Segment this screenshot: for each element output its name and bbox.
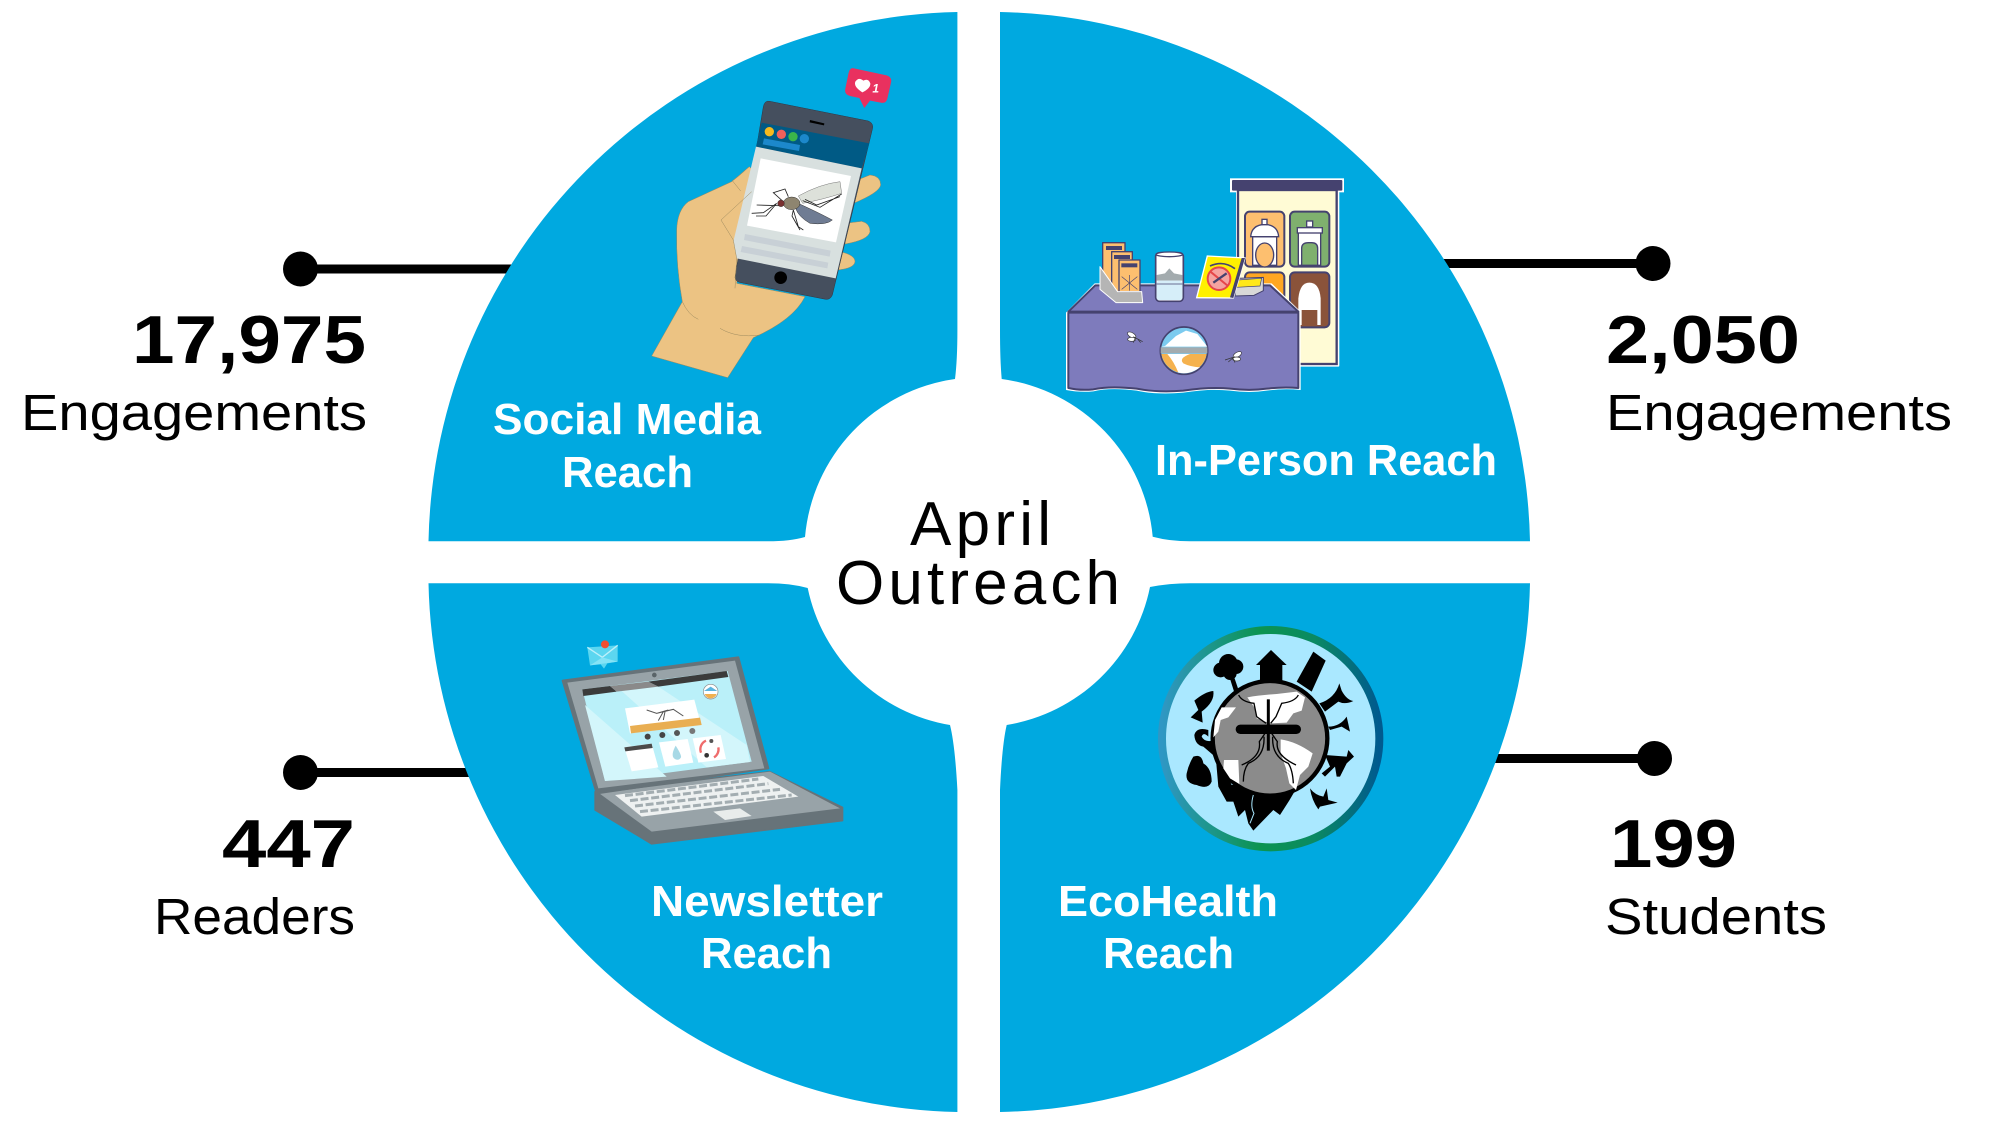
newsletter page content — [624, 684, 726, 771]
stat: ecohealth students: 199 — [1610, 806, 1737, 882]
phone body — [733, 101, 873, 299]
person two — [1328, 717, 1350, 732]
banner bottles — [1251, 219, 1322, 325]
stat: in-person engagements: 2,050 — [1606, 302, 1800, 378]
central title — [836, 490, 1120, 618]
label: newsletter reach — [651, 877, 883, 978]
roots — [1215, 748, 1298, 831]
banner stand — [1230, 178, 1344, 367]
icon: like notification badge: 1 — [872, 82, 879, 96]
panel: in-person quadrant — [1000, 12, 1530, 541]
panel: newsletter quadrant — [428, 583, 957, 1112]
icon: email notification — [587, 640, 618, 669]
panel: connector ecohealth — [1480, 741, 1672, 776]
stat: ecohealth students — [1605, 806, 1827, 945]
label: ecohealth reach: EcoHealth — [1058, 877, 1278, 926]
stat: in-person engagements: Engagements — [1606, 384, 1952, 441]
globe — [1213, 681, 1327, 796]
silhouettes around globe — [1186, 650, 1354, 831]
label: ecohealth reach: Reach — [1103, 929, 1234, 978]
table mosquitoes — [1126, 331, 1243, 363]
label: in-person reach: In-Person Reach — [1155, 436, 1497, 485]
table logo — [1160, 327, 1208, 374]
stat: social media engagements: 17,975 — [132, 302, 366, 378]
icon: hand holding phone with mosquito — [652, 68, 891, 378]
panel: connector newsletter — [283, 755, 485, 790]
laptop base — [595, 772, 843, 844]
continents — [1213, 692, 1313, 790]
stat: ecohealth students: Students — [1605, 888, 1827, 945]
label: social media reach — [493, 395, 762, 497]
icon: ecohealth globe logo — [1162, 630, 1379, 847]
logo ring — [1162, 630, 1379, 847]
stat: social media engagements: Engagements — [21, 384, 367, 441]
stat: newsletter readers: Readers — [154, 888, 355, 945]
house — [1256, 650, 1287, 682]
dog — [1322, 750, 1354, 777]
label: ecohealth reach — [1058, 877, 1278, 978]
label: social media reach: Social Media — [493, 395, 762, 444]
label: newsletter reach: Newsletter — [651, 877, 883, 926]
icon: like notification badge — [845, 68, 891, 108]
river line — [1250, 795, 1254, 823]
panel: connector in-person — [1430, 246, 1670, 281]
mosquito on globe — [1236, 695, 1301, 783]
cloud — [1186, 756, 1212, 787]
icon: laptop with newsletter — [563, 640, 843, 844]
stat: social media engagements — [21, 302, 367, 441]
stat: newsletter readers — [154, 806, 355, 945]
bird — [1310, 788, 1338, 809]
panel: social media quadrant — [428, 12, 957, 541]
laptop screen lid — [563, 657, 768, 793]
stat: in-person engagements — [1606, 302, 1952, 441]
skyscraper — [1297, 652, 1326, 692]
hand thumb crease lines — [682, 167, 760, 336]
icon: outreach table with banner and products — [1066, 178, 1344, 393]
yellow poster and leaflet stack — [1197, 256, 1263, 298]
wave — [1194, 729, 1215, 757]
stat: newsletter readers: 447 — [222, 806, 355, 882]
fish — [1191, 691, 1214, 723]
central title: April — [910, 490, 1051, 559]
label: social media reach: Reach — [562, 448, 693, 497]
mosquito on screen — [752, 182, 842, 230]
central title: Outreach — [836, 549, 1120, 618]
panel: connector social media — [283, 252, 525, 286]
person one — [1319, 683, 1353, 712]
hand fingers and palm — [652, 167, 881, 378]
water jar — [1156, 252, 1183, 301]
tree — [1213, 654, 1243, 691]
label: newsletter reach: Reach — [701, 929, 832, 978]
table — [1066, 283, 1301, 393]
panel: ecohealth quadrant — [1000, 583, 1530, 1112]
brochure holder — [1100, 243, 1143, 303]
